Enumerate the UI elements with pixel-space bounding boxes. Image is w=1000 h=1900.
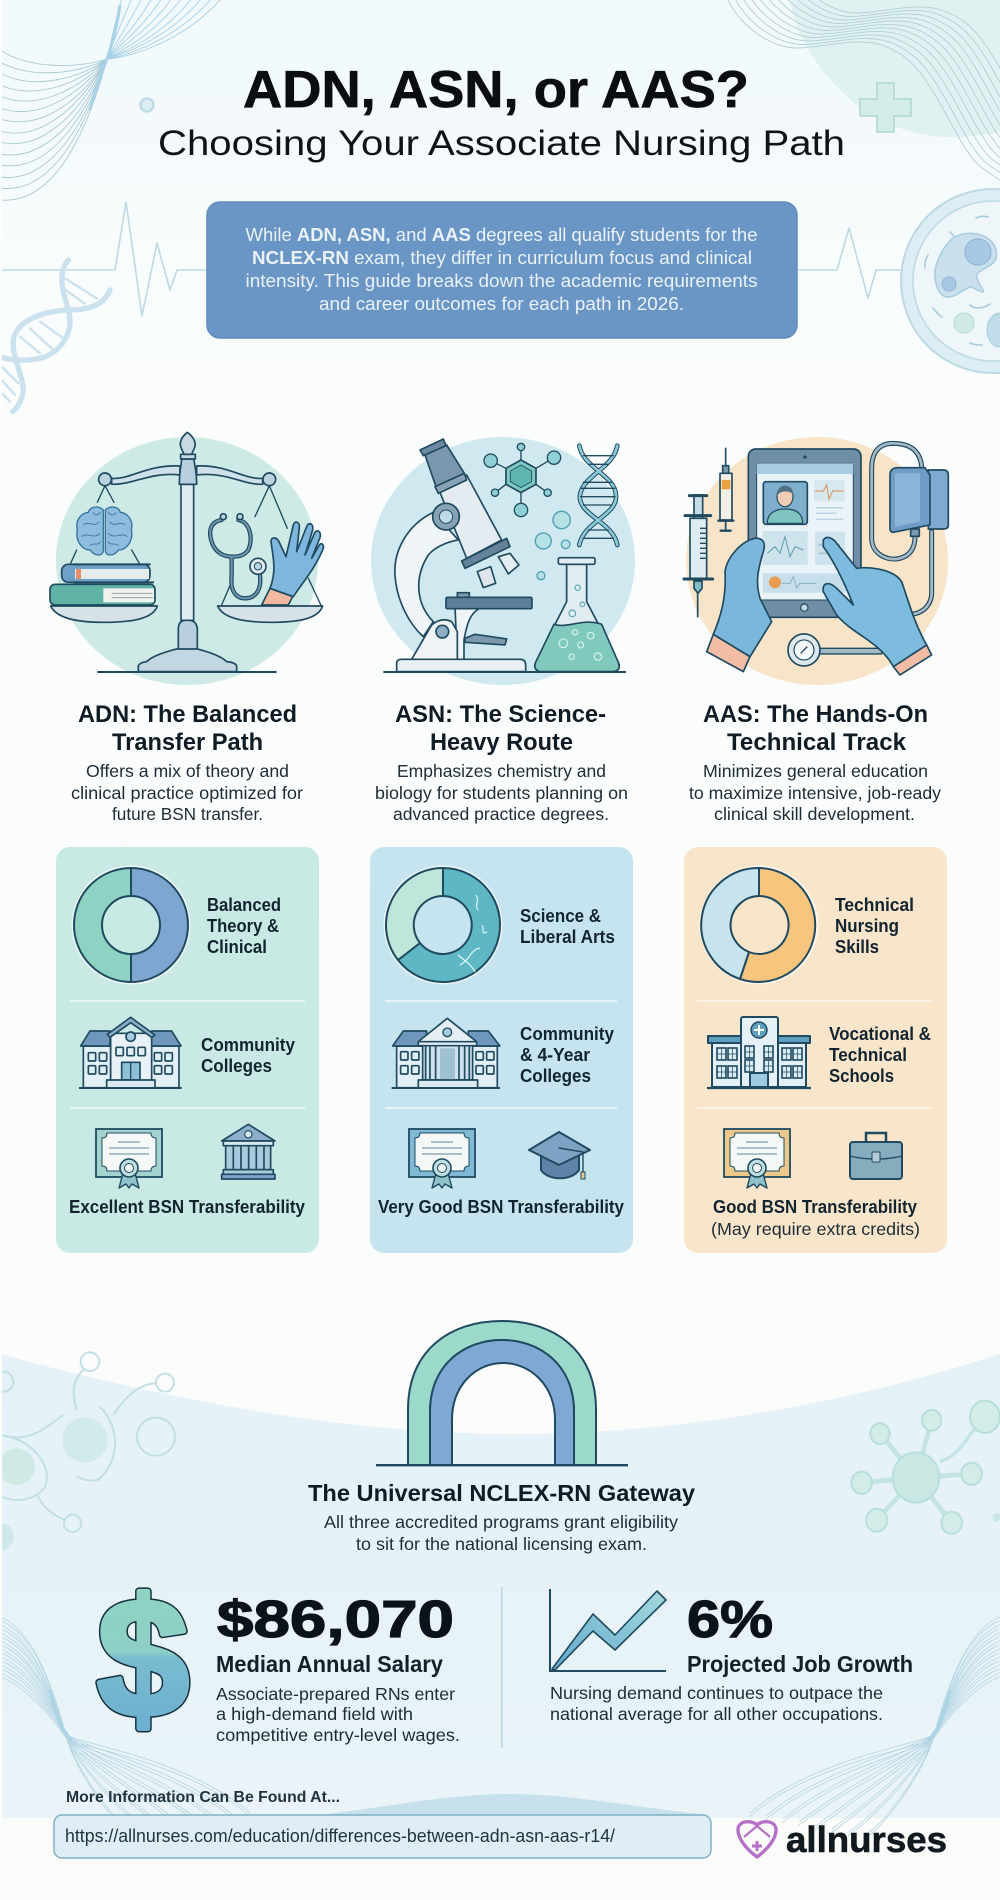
icon: vitals panel — [763, 480, 846, 593]
icon: molecule — [484, 443, 561, 517]
stat: job growth: Nursing demand continues to outpace the — [550, 1683, 883, 1703]
stat: job growth: national average for all other occupations. — [550, 1704, 883, 1724]
stat: job growth — [550, 1591, 913, 1724]
label: school type: Colleges — [201, 1056, 272, 1076]
icon: community college — [79, 1017, 182, 1088]
ASN description: Emphasizes chemistry and — [397, 761, 606, 781]
icon: books — [50, 564, 155, 605]
icon: certificate — [409, 1129, 475, 1188]
AAS heading: Technical Track — [727, 729, 907, 756]
icon: stethoscope — [210, 514, 266, 598]
gateway description: to sit for the national licensing exam. — [356, 1534, 647, 1554]
icon: right pan — [218, 606, 323, 622]
label: curriculum focus: Science & — [520, 906, 601, 926]
decoration: footer wave — [320, 1794, 710, 1815]
chart: job growth line — [550, 1589, 666, 1671]
ADN description — [71, 761, 303, 824]
icon: microscope — [395, 439, 532, 672]
AAS description: to maximize intensive, job-ready — [689, 783, 941, 803]
label: curriculum focus: Balanced — [207, 895, 281, 915]
label: school type: Technical — [829, 1045, 907, 1065]
gateway heading: The Universal NCLEX-RN Gateway — [308, 1480, 695, 1506]
gateway description: All three accredited programs grant eligibility — [324, 1512, 678, 1532]
label: curriculum focus: Theory & — [207, 916, 279, 936]
intro callout box: While ADN, ASN, and AAS degrees all qualify students for the — [246, 225, 758, 245]
label: school type — [520, 1024, 614, 1086]
logo: allnurses: allnurses — [786, 1819, 947, 1860]
decoration: top-right blob and contour lines — [728, 0, 1000, 185]
chart: ADN donut — [72, 866, 190, 984]
icon: brain — [77, 507, 132, 555]
icon: blood pressure cuff — [890, 468, 948, 536]
icon: graduation cap — [529, 1132, 590, 1179]
label: curriculum focus: Technical — [835, 895, 914, 915]
ASN heading — [395, 701, 606, 756]
chart: ASN donut — [384, 866, 502, 984]
icon: patient card — [763, 482, 807, 524]
label: school type: Community — [201, 1035, 295, 1055]
ADN description: clinical practice optimized for — [71, 783, 303, 803]
label: curriculum focus — [520, 906, 615, 947]
label: transferability — [711, 1197, 920, 1239]
icon: university — [222, 1124, 275, 1179]
icon: scale finial — [179, 432, 197, 484]
stat: median salary — [216, 1591, 460, 1745]
stat: median salary: competitive entry-level wages. — [216, 1725, 460, 1745]
icon: NCLEX gateway arch — [376, 1321, 628, 1466]
panel: ASN illustration — [371, 437, 635, 685]
label: school type — [201, 1035, 295, 1076]
stat: job growth: Projected Job Growth — [687, 1651, 913, 1677]
label: curriculum focus — [207, 895, 281, 957]
decoration: cell — [901, 189, 1000, 373]
intro callout box: intensity. This guide breaks down the academic requirements — [246, 271, 758, 291]
icon: certificate — [96, 1129, 162, 1188]
decoration: left molecules — [0, 1352, 175, 1551]
ADN heading: ADN: The Balanced — [78, 701, 297, 728]
AAS description — [689, 761, 941, 824]
icon: heart — [738, 1822, 776, 1857]
icon: blood pressure tube — [872, 443, 932, 614]
panel: ADN card — [56, 847, 319, 1253]
gateway description — [324, 1512, 678, 1554]
subtitle: Choosing Your Associate Nursing Path — [158, 124, 845, 163]
panel: ASN card — [370, 847, 633, 1253]
label: school type: Community — [520, 1024, 614, 1044]
label: school type: & 4-Year — [520, 1045, 590, 1065]
icon: small circle — [140, 98, 154, 112]
label: curriculum focus: Skills — [835, 937, 879, 957]
icon: technical school — [707, 1017, 811, 1088]
intro callout box: NCLEX-RN exam, they differ in curriculum focus and clinical — [252, 248, 752, 268]
ASN heading: ASN: The Science- — [395, 701, 606, 728]
AAS description: Minimizes general education — [703, 761, 928, 781]
URL box: https://allnurses.com/education/differences-between-adn-asn-aas-r14/ — [65, 1825, 616, 1846]
label: school type: Colleges — [520, 1066, 591, 1086]
AAS heading — [703, 701, 928, 756]
icon: scale pole — [181, 484, 194, 620]
URL box — [54, 1815, 711, 1858]
icon: medical cross — [860, 83, 911, 132]
icon: right glove — [823, 538, 932, 675]
decoration: top-left contour lines — [0, 0, 222, 200]
intro callout box: and career outcomes for each path in 2026. — [319, 294, 684, 314]
stat: median salary: Median Annual Salary — [216, 1651, 443, 1677]
icon: four-year college — [392, 1018, 500, 1088]
ASN description: biology for students planning on — [375, 783, 628, 803]
label: curriculum focus: Liberal Arts — [520, 927, 615, 947]
title: ADN, ASN, or AAS? — [243, 61, 749, 119]
panel: ADN illustration — [50, 432, 323, 685]
intro callout box — [207, 202, 797, 338]
label: curriculum focus: Nursing — [835, 916, 899, 936]
label: transferability: Very Good BSN Transferability — [378, 1197, 624, 1217]
stat: median salary: $86,070 — [217, 1591, 454, 1649]
chart: AAS donut — [700, 866, 818, 984]
ASN description: advanced practice degrees. — [393, 804, 609, 824]
icon: stethoscope head — [788, 634, 882, 666]
ASN description — [375, 761, 628, 824]
icon: bubbles — [535, 511, 570, 580]
AAS heading: AAS: The Hands-On — [703, 701, 928, 728]
label: school type: Schools — [829, 1066, 894, 1086]
icon: glove — [262, 522, 323, 605]
decoration: right molecule — [851, 1401, 1000, 1534]
stat: median salary: Associate-prepared RNs enter — [216, 1684, 455, 1704]
icon: dollar sign: $ — [97, 1564, 189, 1752]
icon: syringe right — [718, 448, 733, 531]
ADN description: Offers a mix of theory and — [86, 761, 289, 781]
icon: syringe left — [684, 495, 713, 617]
label: school type: Vocational & — [829, 1024, 931, 1044]
label: transferability: (May require extra credits) — [711, 1219, 920, 1239]
panel: AAS illustration — [684, 437, 948, 685]
ADN heading: Transfer Path — [112, 729, 263, 756]
icon: left pan — [51, 606, 157, 622]
icon: flask — [535, 558, 619, 672]
ADN heading — [78, 701, 297, 756]
icon: left glove — [707, 538, 772, 672]
footer note: More Information Can Be Found At... — [66, 1789, 340, 1806]
icon: scale base — [97, 620, 277, 672]
icon: briefcase — [850, 1133, 902, 1179]
icon: certificate — [724, 1129, 790, 1188]
stat: job growth: 6% — [687, 1591, 773, 1649]
label: transferability: Excellent BSN Transferability — [69, 1197, 305, 1217]
panel: AAS card — [684, 847, 947, 1253]
icon: scale beam — [71, 466, 322, 607]
decoration: ECG line — [2, 202, 900, 316]
ADN description: future BSN transfer. — [112, 804, 263, 824]
icon: DNA helix — [579, 446, 617, 545]
ASN heading: Heavy Route — [430, 729, 573, 756]
decoration: bottom contour lines — [0, 1617, 1000, 1839]
stat: median salary: a high-demand field with — [216, 1704, 413, 1724]
label: school type — [829, 1024, 931, 1086]
label: transferability: Good BSN Transferability — [713, 1197, 917, 1217]
label: curriculum focus: Clinical — [207, 937, 267, 957]
icon: dollar sign: $ — [97, 1564, 189, 1752]
label: curriculum focus — [835, 895, 914, 957]
bottom wave band — [0, 1354, 1000, 1818]
decoration: DNA strand — [2, 260, 110, 412]
icon: tablet — [748, 449, 861, 617]
AAS description: clinical skill development. — [714, 804, 915, 824]
